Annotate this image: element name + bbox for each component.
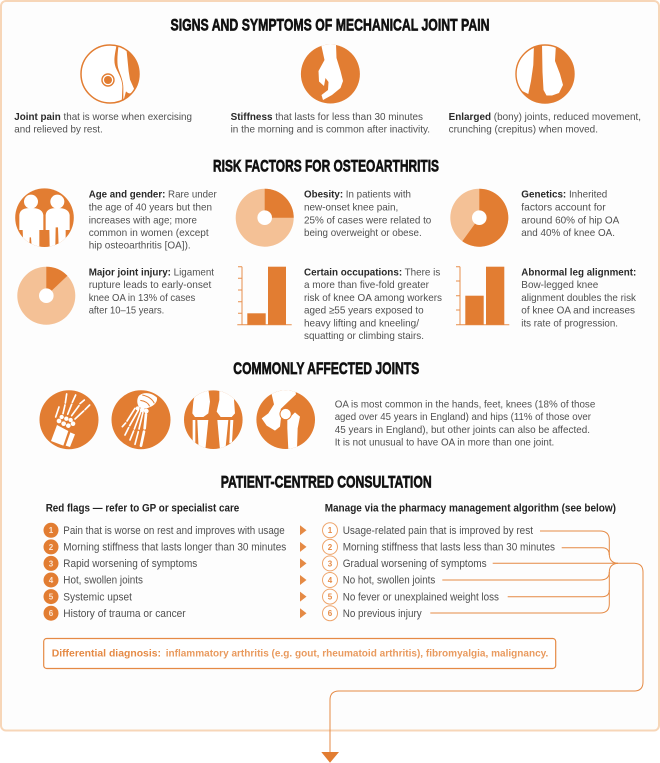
text: stiffness: Stiffness that lasts for less than 30 minutes <box>231 112 423 123</box>
chart: leg alignment bars <box>456 267 509 325</box>
icon: enlarged foot <box>512 44 574 103</box>
text: commonly affected joints description: 45 years in England), but other joints can also be affected. <box>335 425 590 436</box>
list: pharmacy management: Gradual worsening of symptoms <box>343 558 487 570</box>
text: age and gender: Age and gender: Rare under <box>89 189 217 200</box>
list: pharmacy management: 2 <box>328 543 333 552</box>
text: obesity: Obesity: In patients with <box>304 189 411 200</box>
text: stiffness: in the morning and is common after inactivity. <box>231 125 430 136</box>
text: major joint injury: after 10–15 years. <box>89 306 164 317</box>
text: commonly affected joints description <box>335 399 596 448</box>
subheading: red flags: Red flags — refer to GP or specialist care <box>46 503 239 515</box>
list: pharmacy management: Usage-related pain that is improved by rest <box>343 525 533 537</box>
text: major joint injury: rupture leads to early-onset <box>89 280 211 291</box>
text: certain occupations: squatting or climbing stairs. <box>304 331 424 342</box>
text: commonly affected joints description: aged over 45 years in England) and hips (11% of those over <box>335 412 592 423</box>
text: abnormal leg alignment: of knee OA and increases <box>521 306 635 317</box>
title: signs and symptoms: SIGNS AND SYMPTOMS OF MECHANICAL JOINT PAIN <box>170 16 490 35</box>
list: red flags: Rapid worsening of symptoms <box>63 558 198 570</box>
list: pharmacy management: 4 <box>328 576 333 585</box>
text: certain occupations: Certain occupations: There is <box>304 267 440 278</box>
callout: differential diagnosis: inflammatory arthritis (e.g. gout, rheumatoid arthritis), fibromyalgia, malignancy. <box>166 648 548 660</box>
text: genetics: Genetics: Inherited <box>521 189 607 200</box>
icon: stiffness hand <box>301 44 360 104</box>
arrow: connector to algorithm <box>321 531 643 763</box>
text: age and gender <box>89 189 217 252</box>
text: abnormal leg alignment <box>521 267 637 329</box>
text: major joint injury: Major joint injury: Ligament <box>89 267 214 278</box>
list: pharmacy management: 3 <box>328 559 333 568</box>
text: abnormal leg alignment: Bow-legged knee <box>521 280 599 291</box>
icon: joint pain leg <box>81 45 143 105</box>
arrows: red flag markers <box>300 525 306 618</box>
callout: differential diagnosis: Differential diagnosis: <box>52 648 161 660</box>
text: commonly affected joints description: It is not unusual to have OA in more than one joint. <box>335 437 554 448</box>
text: certain occupations: heavy lifting and kneeling/ <box>304 318 419 329</box>
text: genetics: around 60% of hip OA <box>521 215 620 226</box>
list: red flags: Systemic upset <box>63 591 132 603</box>
list: red flags: Pain that is worse on rest and improves with usage <box>63 525 285 537</box>
text: enlarged joints: Enlarged (bony) joints, reduced movement, <box>449 112 641 123</box>
list: pharmacy management <box>322 523 556 621</box>
heading: commonly affected joints: COMMONLY AFFECTED JOINTS <box>233 359 419 378</box>
icon: hand bones <box>40 390 98 449</box>
list: pharmacy management: 1 <box>328 526 333 535</box>
text: joint pain: and relieved by rest. <box>14 125 103 136</box>
list: pharmacy management: No fever or unexplained weight loss <box>343 591 500 603</box>
chart: genetics pie 60% <box>450 189 508 247</box>
list: pharmacy management: Morning stiffness that lasts less than 30 minutes <box>343 542 556 554</box>
text: stiffness <box>231 112 430 136</box>
text: genetics <box>521 189 620 239</box>
text: major joint injury: knee OA in 13% of cases <box>89 293 195 304</box>
text: obesity: being overweight or obese. <box>304 228 422 239</box>
list: red flags: Hot, swollen joints <box>63 575 144 587</box>
subheading: manage via pharmacy: Manage via the pharmacy management algorithm (see below) <box>325 503 616 515</box>
list: red flags: 1 <box>49 526 54 535</box>
icon: knee bones <box>184 389 243 450</box>
text: major joint injury <box>89 267 214 317</box>
list: red flags: History of trauma or cancer <box>63 608 186 620</box>
text: enlarged joints <box>449 112 641 136</box>
icon: hip bones <box>256 388 315 450</box>
text: certain occupations: a more than five-fold greater <box>304 280 430 291</box>
chart: obesity pie 25% <box>236 189 294 247</box>
text: obesity <box>304 189 432 239</box>
text: certain occupations: aged ≥55 years exposed to <box>304 306 424 317</box>
text: age and gender: the age of 40 years but then <box>89 202 212 213</box>
chart: major joint injury pie 13% <box>17 267 75 325</box>
list: red flags: 3 <box>49 559 54 568</box>
list: red flags: 6 <box>49 609 54 618</box>
text: abnormal leg alignment: its rate of progression. <box>521 318 618 329</box>
text: abnormal leg alignment: Abnormal leg alignment: <box>521 267 636 278</box>
heading: risk factors: RISK FACTORS FOR OSTEOARTHRITIS <box>213 156 439 175</box>
list: red flags: 5 <box>49 592 54 602</box>
text: obesity: 25% of cases were related to <box>304 215 432 226</box>
list: red flags: 4 <box>49 576 54 585</box>
text: certain occupations: risk of knee OA among workers <box>304 293 442 304</box>
text: genetics: and 40% of knee OA. <box>521 228 615 239</box>
icon: age and gender people <box>15 188 74 247</box>
text: certain occupations <box>304 267 442 342</box>
text: age and gender: common in women (except <box>89 228 209 239</box>
heading: patient-centred consultation: PATIENT-CENTRED CONSULTATION <box>221 473 432 492</box>
icon: foot bones <box>112 390 170 449</box>
text: enlarged joints: crunching (crepitus) when moved. <box>449 125 598 136</box>
text: age and gender: hip osteoarthritis [OA]). <box>89 241 191 252</box>
list: red flags <box>44 523 287 621</box>
text: abnormal leg alignment: alignment doubles the risk <box>521 293 637 304</box>
callout: differential diagnosis <box>44 638 556 668</box>
list: pharmacy management: No previous injury <box>343 608 422 620</box>
chart: occupations bars <box>237 267 292 325</box>
list: red flags: Morning stiffness that lasts longer than 30 minutes <box>63 542 287 554</box>
list: pharmacy management: 6 <box>328 609 333 618</box>
list: pharmacy management: No hot, swollen joints <box>343 575 436 587</box>
text: genetics: factors account for <box>521 202 606 213</box>
text: age and gender: increases with age; more <box>89 215 197 226</box>
text: obesity: new-onset knee pain, <box>304 202 398 213</box>
text: joint pain: Joint pain that is worse when exercising <box>14 112 192 123</box>
list: red flags: 2 <box>49 543 54 552</box>
text: commonly affected joints description: OA is most common in the hands, feet, knees (18% of those <box>335 399 596 410</box>
list: pharmacy management: 5 <box>328 592 333 602</box>
text: joint pain <box>14 112 192 136</box>
